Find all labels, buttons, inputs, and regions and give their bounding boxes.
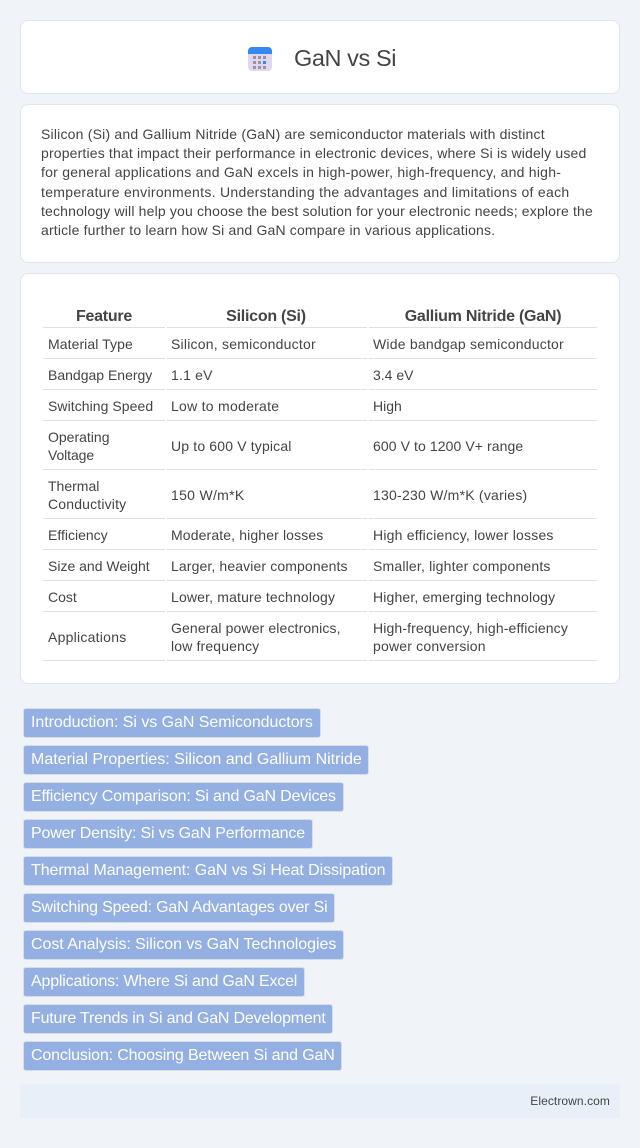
row: efficiency: High efficiency, lower losses xyxy=(373,527,554,543)
row: switching speed: Switching Speed xyxy=(48,398,153,414)
row: thermal conductivity: Conductivity xyxy=(48,496,126,512)
chip: thermal management: Thermal Management: GaN vs Si Heat Dissipation xyxy=(31,862,385,879)
chip: introduction: Introduction: Si vs GaN Semiconductors xyxy=(31,714,313,731)
chip: power density xyxy=(23,819,313,849)
row: switching speed: Low to moderate xyxy=(171,398,279,414)
row: thermal conductivity: 130-230 W/m*K (varies) xyxy=(373,487,527,503)
title: GaN vs Si xyxy=(294,45,396,71)
row: size and weight: Size and Weight xyxy=(48,558,150,574)
row: cost: Cost xyxy=(48,589,77,605)
table header: Feature xyxy=(76,308,132,325)
chip: introduction xyxy=(23,708,321,738)
row: applications: High-frequency, high-efficiency xyxy=(373,620,568,636)
row: bandgap energy: 3.4 eV xyxy=(373,367,413,383)
footer text: Electrown.com xyxy=(530,1094,610,1108)
row: cost: Lower, mature technology xyxy=(171,589,335,605)
row: material type: Silicon, semiconductor xyxy=(171,336,316,352)
row: size and weight xyxy=(43,558,597,581)
chip: future trends: Future Trends in Si and GaN Development xyxy=(31,1010,326,1027)
comparison table card xyxy=(20,273,620,684)
row: size and weight: Larger, heavier components xyxy=(171,558,348,574)
row: operating voltage: 600 V to 1200 V+ range xyxy=(373,438,523,454)
topic chips list xyxy=(23,708,393,1071)
chip: conclusion: Conclusion: Choosing Between Si and GaN xyxy=(31,1047,335,1064)
chip: power density: Power Density: Si vs GaN Performance xyxy=(31,825,305,842)
intro text: properties that impact their performance in electronic devices, where Si is widely used xyxy=(41,145,586,161)
row: applications: General power electronics, xyxy=(171,620,341,636)
row: thermal conductivity: Thermal xyxy=(48,478,99,494)
intro text: Silicon (Si) and Gallium Nitride (GaN) are semiconductor materials with distinct xyxy=(41,126,545,142)
row: operating voltage: Voltage xyxy=(48,447,94,463)
row: thermal conductivity: 150 W/m*K xyxy=(171,487,244,503)
table header: Silicon (Si) xyxy=(226,308,306,325)
row: applications xyxy=(43,620,597,661)
chip: efficiency comparison: Efficiency Comparison: Si and GaN Devices xyxy=(31,788,336,805)
chip: switching speed: Switching Speed: GaN Advantages over Si xyxy=(31,899,327,916)
row: applications: low frequency xyxy=(171,638,259,654)
chip: conclusion xyxy=(23,1041,342,1071)
chip: material properties xyxy=(23,745,369,775)
intro card xyxy=(20,104,620,263)
row: efficiency: Moderate, higher losses xyxy=(171,527,323,543)
chip: efficiency comparison xyxy=(23,782,344,812)
icon: calendar xyxy=(248,47,272,71)
row: bandgap energy xyxy=(43,367,597,390)
row: bandgap energy: Bandgap Energy xyxy=(48,367,152,383)
row: material type xyxy=(43,336,597,359)
chip: thermal management xyxy=(23,856,393,886)
row: applications: Applications xyxy=(48,629,126,645)
row: efficiency xyxy=(43,527,597,550)
row: size and weight: Smaller, lighter components xyxy=(373,558,551,574)
row: cost: Higher, emerging technology xyxy=(373,589,555,605)
row: operating voltage xyxy=(43,429,597,470)
intro text: article further to learn how Si and GaN compare in various applications. xyxy=(41,222,495,238)
row: thermal conductivity xyxy=(43,478,597,519)
chip: cost analysis xyxy=(23,930,344,960)
header card xyxy=(20,20,620,94)
row: operating voltage: Up to 600 V typical xyxy=(171,438,292,454)
row: cost xyxy=(43,589,597,612)
row: material type: Wide bandgap semiconductor xyxy=(373,336,564,352)
intro text: for general applications and GaN excels in high-power, high-frequency, and high- xyxy=(41,164,561,180)
chip: future trends xyxy=(23,1004,333,1034)
chip: cost analysis: Cost Analysis: Silicon vs GaN Technologies xyxy=(31,936,336,953)
row: bandgap energy: 1.1 eV xyxy=(171,367,213,383)
row: efficiency: Efficiency xyxy=(48,527,108,543)
row: operating voltage: Operating xyxy=(48,429,109,445)
footer bar xyxy=(20,1084,620,1118)
row: switching speed: High xyxy=(373,398,402,414)
table header xyxy=(43,308,597,328)
row: material type: Material Type xyxy=(48,336,133,352)
row: applications: power conversion xyxy=(373,638,486,654)
chip: material properties: Material Properties: Silicon and Gallium Nitride xyxy=(31,751,362,768)
intro text: technology will help you choose the best solution for your electronic needs; explore the xyxy=(41,203,593,219)
table header: Gallium Nitride (GaN) xyxy=(405,308,561,325)
chip: applications: Applications: Where Si and GaN Excel xyxy=(31,973,297,990)
intro text: temperature environments. Understanding the advantages and limitations of each xyxy=(41,184,569,200)
chip: applications xyxy=(23,967,305,997)
intro text xyxy=(41,126,593,238)
chip: switching speed xyxy=(23,893,335,923)
row: switching speed xyxy=(43,398,597,421)
